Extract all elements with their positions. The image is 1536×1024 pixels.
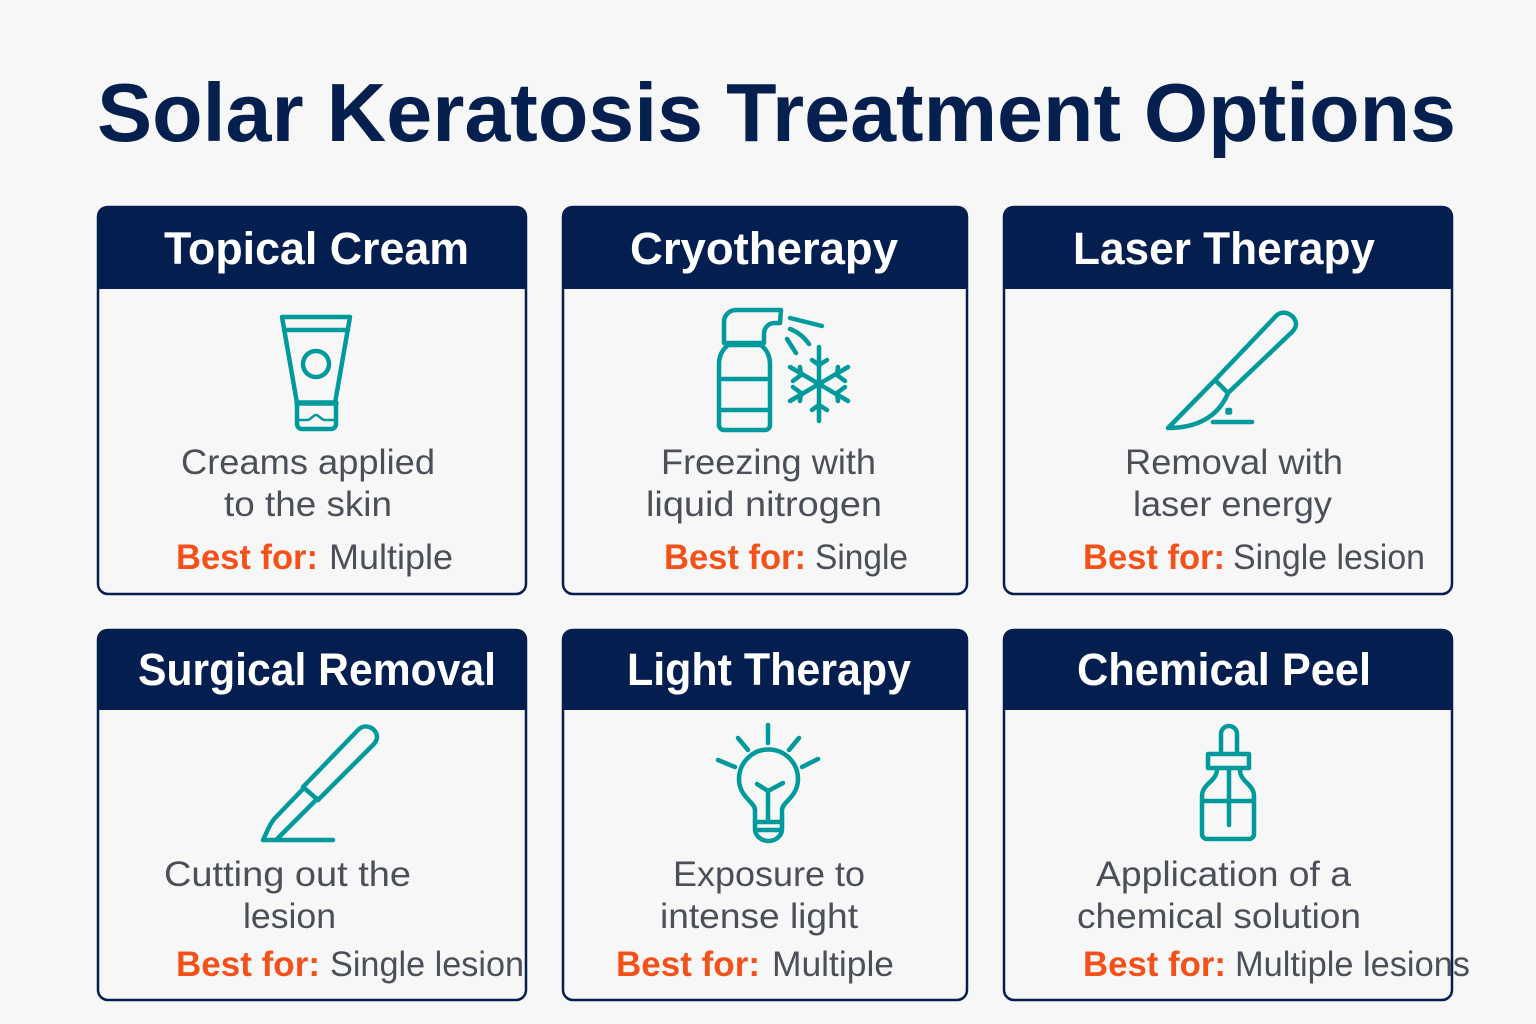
header: surgical removal [97,629,527,710]
description: chemical peel [1077,855,1361,936]
best for: light therapy [616,945,894,984]
best for: topical cream [176,538,453,577]
panel: surgical removal [97,629,527,1001]
description: cryotherapy: liquid nitrogen [646,485,882,524]
best for: topical cream: Best for: [176,538,318,577]
description: light therapy [660,855,865,936]
header: chemical peel [1003,629,1453,710]
header: light therapy [562,629,968,710]
best for: surgical removal: Single lesion [330,945,524,984]
best for: light therapy: Multiple [772,945,894,984]
panel: light therapy [562,629,968,1001]
header: cryotherapy: Cryotherapy [630,223,898,274]
icon: spray bottle and snowflake [719,310,848,430]
best for: cryotherapy [664,538,908,577]
best for: surgical removal: Best for: [176,945,320,984]
description: surgical removal: Cutting out the [164,855,411,894]
best for: chemical peel [1083,945,1470,984]
best for: laser therapy [1083,538,1425,577]
description: light therapy: intense light [660,897,858,936]
icon: cream tube [282,317,350,429]
description: laser therapy: laser energy [1133,485,1333,524]
description: topical cream [181,443,435,524]
icon: dropper bottle [1202,726,1254,839]
icon: laser scalpel [1168,313,1296,428]
header: topical cream [97,206,527,289]
best for: cryotherapy: Best for: [664,538,806,577]
description: cryotherapy: Freezing with [661,443,876,482]
description: chemical peel: Application of a [1096,855,1352,894]
header: surgical removal: Surgical Removal [138,644,496,695]
panel: topical cream [97,206,527,595]
panel: cryotherapy [562,206,968,595]
best for: light therapy: Best for: [616,945,760,984]
description: topical cream: to the skin [224,485,392,524]
best for: laser therapy: Single lesion [1233,538,1425,577]
header: light therapy: Light Therapy [627,644,911,695]
best for: cryotherapy: Single [815,538,908,577]
description: light therapy: Exposure to [673,855,865,894]
description: cryotherapy [646,443,882,524]
header: topical cream: Topical Cream [164,223,469,274]
icon: scalpel [263,726,377,840]
description: surgical removal [164,855,411,936]
description: laser therapy: Removal with [1125,443,1343,482]
description: laser therapy [1125,443,1343,524]
description: chemical peel: chemical solution [1077,897,1361,936]
best for: surgical removal [176,945,524,984]
header: laser therapy: Laser Therapy [1073,223,1375,274]
title: Solar Keratosis Treatment Options [97,66,1456,159]
panel: laser therapy [1003,206,1453,595]
best for: topical cream: Multiple [329,538,453,577]
header: cryotherapy [562,206,968,289]
header: chemical peel: Chemical Peel [1077,644,1371,695]
description: topical cream: Creams applied [181,443,435,482]
description: surgical removal: lesion [243,897,336,936]
header: laser therapy [1003,206,1453,289]
best for: laser therapy: Best for: [1083,538,1225,577]
panel: chemical peel [1003,629,1470,1001]
icon: light bulb [718,725,818,841]
best for: chemical peel: Best for: [1083,945,1226,984]
best for: chemical peel: Multiple lesions [1235,945,1470,984]
